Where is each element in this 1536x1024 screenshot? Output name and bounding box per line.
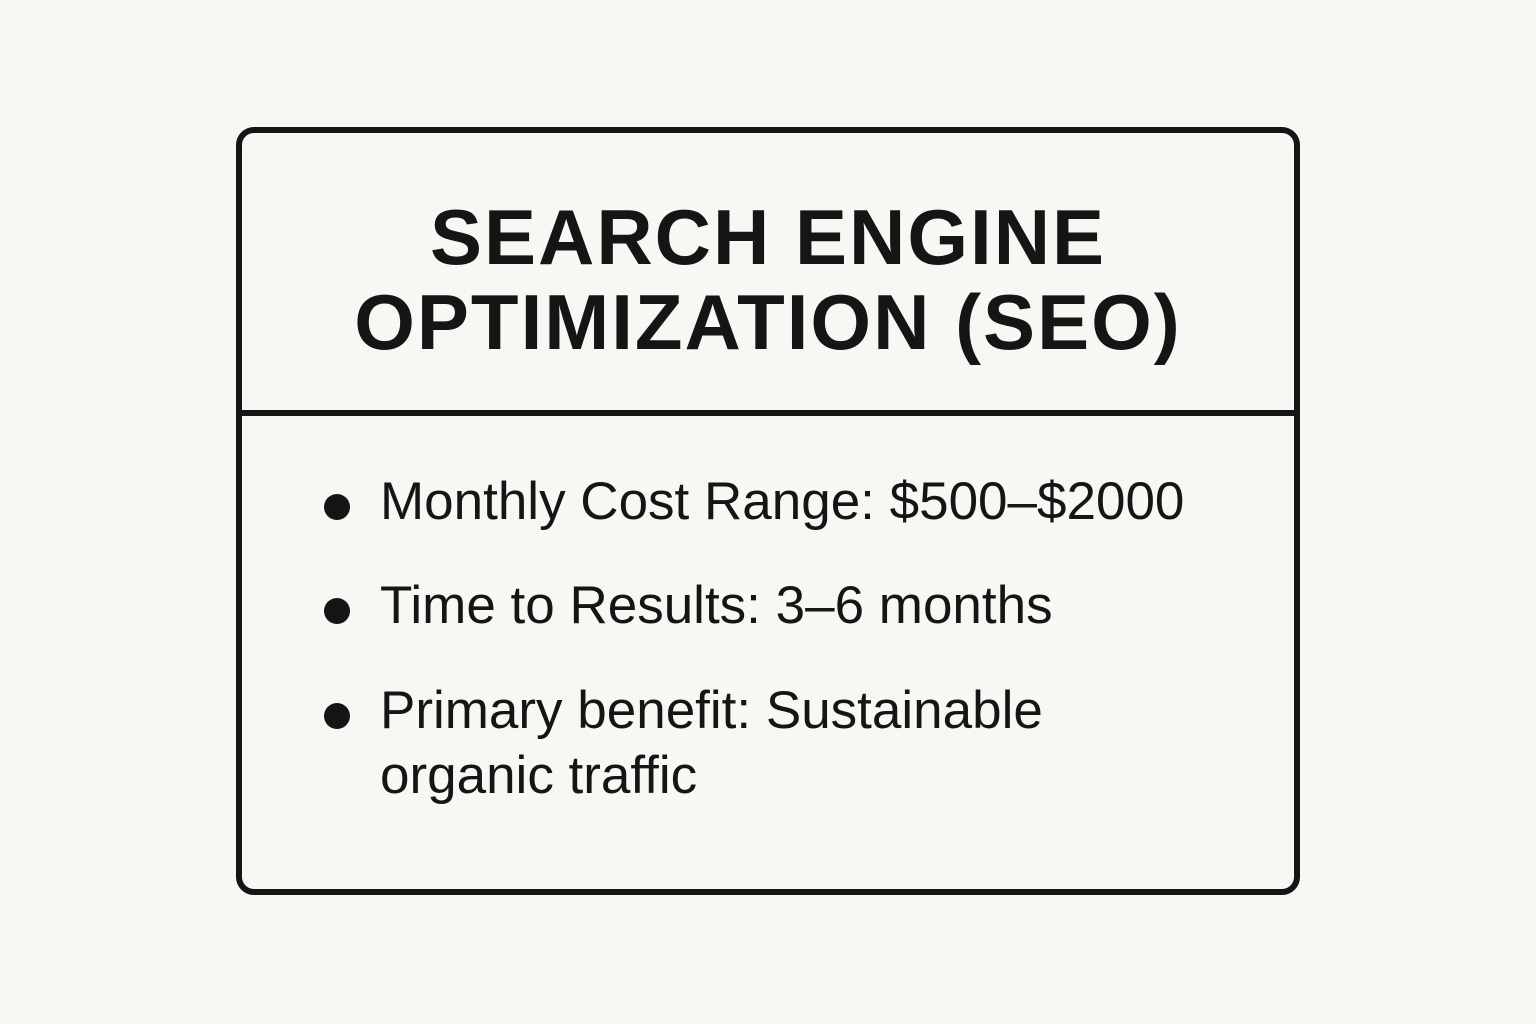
bullet: monthly cost: Monthly Cost Range: $500–$2000 <box>380 472 1184 531</box>
title: OPTIMIZATION (SEO) <box>354 278 1182 366</box>
bullet: primary benefit <box>324 681 1043 805</box>
bullet: primary benefit: organic traffic <box>380 746 697 805</box>
bullet: primary benefit: Primary benefit: Sustainable <box>380 681 1043 740</box>
panel: SEO card <box>236 127 1300 895</box>
bullet: time to results: Time to Results: 3–6 months <box>380 576 1053 635</box>
title <box>354 193 1182 366</box>
title: SEARCH ENGINE <box>430 193 1106 281</box>
